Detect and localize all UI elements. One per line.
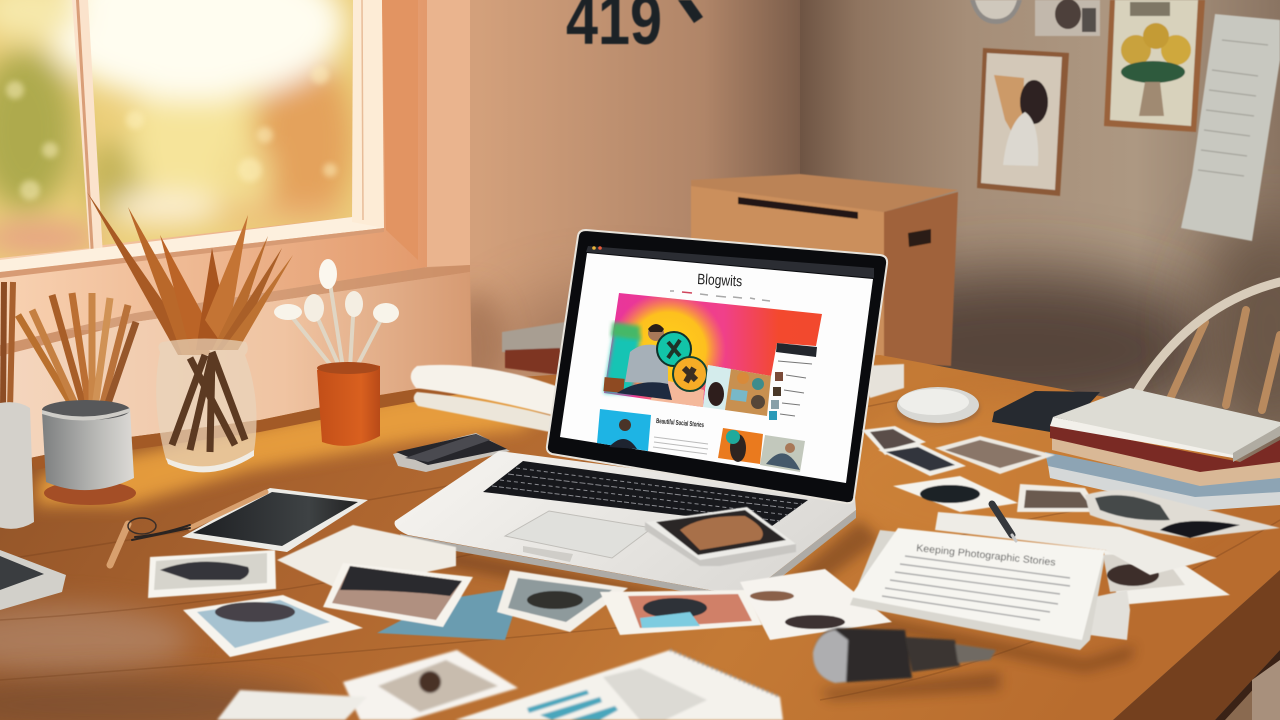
right photo (1103, 547, 1230, 605)
hero banner (603, 293, 822, 407)
keyboard corner (0, 550, 66, 610)
grey cup with pencils (18, 293, 136, 505)
book stack (1045, 388, 1280, 511)
nav (670, 291, 770, 301)
yellow badge (673, 357, 707, 391)
article thumbnail (597, 409, 651, 451)
background books on desk (411, 322, 904, 432)
chair back (1137, 282, 1280, 410)
article images (718, 428, 805, 472)
laptop base (395, 451, 856, 599)
teal badge (657, 332, 691, 366)
man in banner (603, 324, 672, 400)
orange cup with cotton brushes (274, 259, 399, 446)
browser bar (586, 246, 874, 278)
laptop web page (560, 253, 873, 483)
paper stack (850, 512, 1217, 650)
small top photo (1035, 0, 1100, 36)
laptop (395, 230, 887, 599)
small silver device (813, 628, 996, 683)
mouse (896, 387, 980, 426)
tablet (182, 488, 368, 552)
far-left cup (0, 282, 34, 529)
pencil cups (0, 192, 399, 529)
wooden cabinet (691, 174, 958, 366)
glass jar with brushes (87, 192, 293, 472)
wooden desk (0, 355, 1280, 720)
under-window wall (0, 272, 472, 470)
wall art: frames and notes (970, 0, 1280, 241)
banner thumbnails (703, 365, 771, 416)
pinned note (1181, 14, 1280, 241)
back walls (0, 0, 1280, 500)
article text: Beautiful Social Stories (656, 418, 704, 429)
portrait frame (977, 48, 1069, 196)
pen on papers (992, 504, 1016, 541)
keyboard (483, 461, 808, 526)
clock (970, 0, 1022, 24)
window frame (0, 0, 470, 356)
scattered photos (148, 426, 1280, 720)
window glass (0, 0, 355, 262)
flower frame (1104, 0, 1205, 132)
dark notebook (992, 391, 1100, 434)
site logo: Blogwits (697, 271, 743, 290)
smartphone (393, 433, 510, 472)
laptop screen bezel (547, 230, 887, 503)
trackpad (505, 511, 652, 558)
notebook with chart (455, 650, 783, 720)
mullions (72, 0, 103, 258)
photo card on laptop (645, 507, 796, 566)
pencil and glasses (110, 492, 266, 565)
open magazine (1017, 484, 1280, 538)
document heading: Keeping Photographic Stories (916, 543, 1056, 569)
article text (653, 418, 708, 454)
sidebar (769, 343, 817, 420)
shadows under objects (400, 520, 1135, 700)
